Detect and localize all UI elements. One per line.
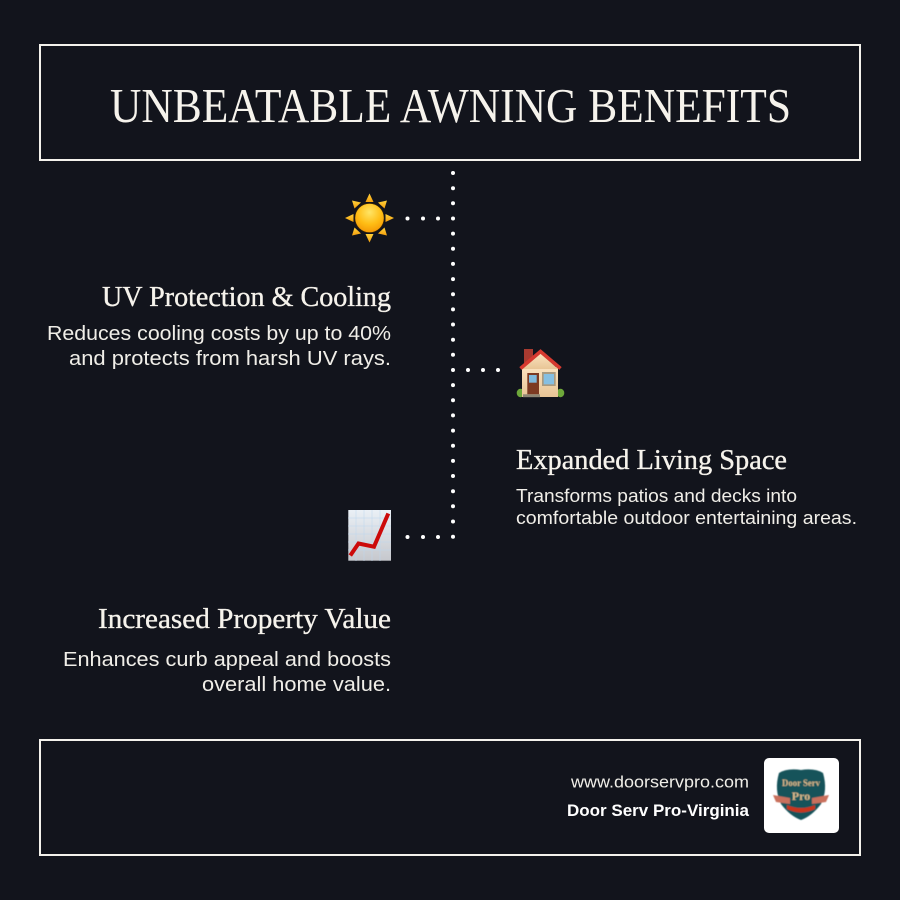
title: UNBEATABLE AWNING BENEFITS <box>110 80 791 133</box>
text: UV protection description: Reduces cooling costs by up to 40% <box>47 322 391 345</box>
text: increased property value description: Enhances curb appeal and boosts <box>63 648 391 671</box>
icon: sun <box>345 194 394 242</box>
heading: expanded living space: Expanded Living Space <box>516 444 787 476</box>
text: expanded living space description: comfortable outdoor entertaining areas. <box>516 507 857 528</box>
connector dots: house <box>466 368 500 372</box>
connector dots: sun <box>406 216 440 220</box>
text: expanded living space description <box>516 485 857 528</box>
text: UV protection description <box>47 322 391 370</box>
icon: house <box>517 349 564 397</box>
title panel <box>40 45 860 160</box>
icon: rising chart <box>348 510 391 561</box>
text: increased property value description <box>63 648 391 696</box>
heading: increased property value: Increased Property Value <box>98 603 391 635</box>
text: increased property value description: overall home value. <box>202 673 391 696</box>
text: expanded living space description: Transforms patios and decks into <box>516 485 797 506</box>
text: UV protection description: and protects from harsh UV rays. <box>69 347 391 370</box>
footer panel <box>40 740 860 855</box>
logo badge: Pro <box>792 789 810 803</box>
logo badge: Door Serv <box>782 778 820 788</box>
dotted timeline <box>451 171 455 539</box>
panel: UV protection <box>47 281 391 370</box>
heading: UV protection: UV Protection & Cooling <box>102 281 391 313</box>
connector dots: chart <box>406 535 440 539</box>
footer website: www.doorservpro.com <box>570 774 749 792</box>
footer company name: Door Serv Pro-Virginia <box>567 802 750 820</box>
panel: expanded living space <box>516 444 857 528</box>
logo badge <box>764 758 839 833</box>
panel: increased property value <box>63 603 391 696</box>
